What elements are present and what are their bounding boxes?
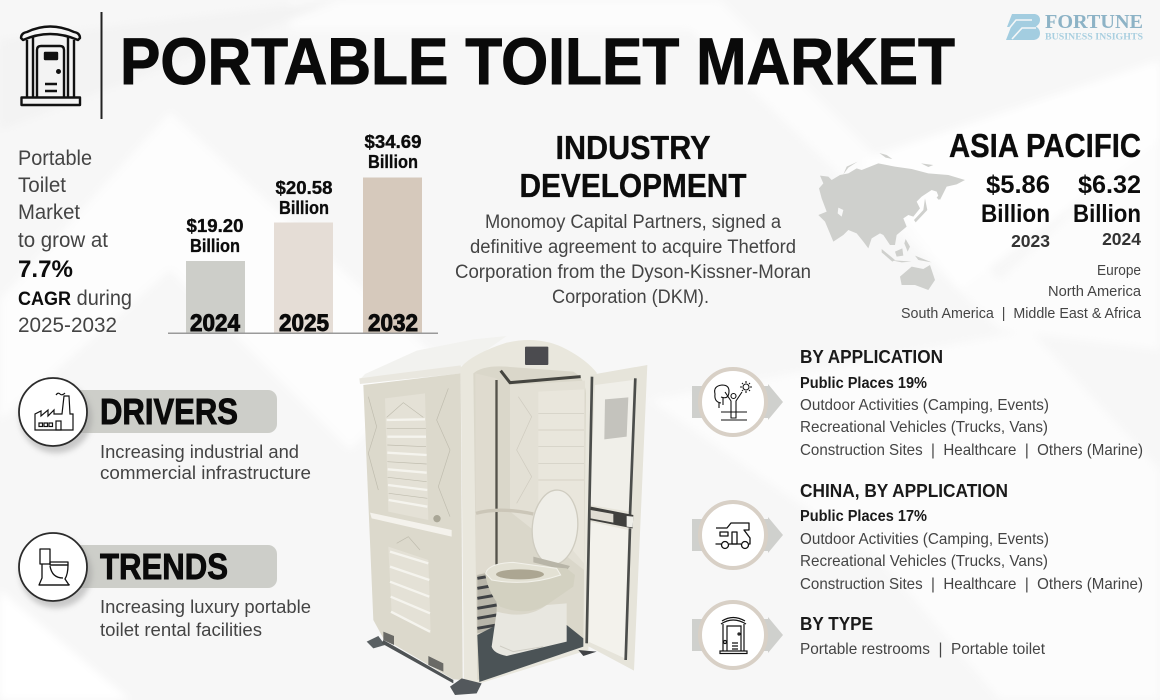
bar chart: 2032	[368, 310, 418, 337]
panel: by application: Recreational Vehicles (Trucks, Vans)	[800, 419, 1048, 436]
panel: China by application: Outdoor Activities (Camping, Events)	[800, 531, 1049, 548]
cabin roof	[360, 336, 507, 379]
front frame	[461, 340, 597, 684]
toilet	[485, 488, 581, 656]
panel: Asia Pacific: North America	[1048, 283, 1142, 300]
left wall	[363, 373, 463, 680]
panel: Asia Pacific: $6.32	[1078, 171, 1141, 199]
panel: by application: Outdoor Activities (Camping, Events)	[800, 397, 1049, 414]
logo: Fortune Business Insights: BUSINESS INSIGHTS	[1045, 32, 1143, 42]
panel: China by application: CHINA, BY APPLICATION	[800, 480, 1008, 501]
panel: Asia Pacific	[901, 127, 1142, 322]
text block: market growth: Toilet	[18, 174, 66, 197]
text block: market growth: 2025-2032	[18, 314, 117, 337]
bar chart: $34.69	[364, 131, 422, 152]
panel: trends	[19, 533, 311, 640]
panel: Asia Pacific: ASIA PACIFIC	[949, 127, 1141, 164]
bar chart: $19.20	[186, 215, 244, 236]
panel: Asia Pacific: $5.86	[986, 171, 1050, 199]
icon: recreational vehicle	[692, 502, 783, 568]
panel: Asia Pacific: Billion	[1073, 200, 1141, 228]
trends heading: TRENDS	[100, 546, 228, 587]
trends label bar	[70, 545, 277, 588]
text block: market growth: to grow at	[18, 229, 108, 252]
panel: Asia Pacific: Billion	[981, 200, 1050, 228]
illustration: portable toilet cabin	[359, 336, 647, 695]
panel: industry development: Corporation (DKM).	[552, 287, 709, 308]
brand plate	[525, 347, 548, 365]
drivers text: Increasing industrial and	[100, 441, 299, 462]
icon: toilet	[19, 533, 87, 601]
panel: Asia Pacific: 2023	[1011, 231, 1050, 251]
floor	[477, 571, 497, 633]
logo: Fortune Business Insights	[1006, 11, 1143, 42]
text block: market growth: 7.7%	[18, 256, 73, 283]
panel: drivers	[19, 378, 311, 483]
panel: by type	[800, 613, 1046, 658]
logo: Fortune Business Insights: FORTUNE	[1045, 11, 1143, 33]
panel: by application: Public Places 19%	[800, 375, 927, 392]
bar chart: 2024	[190, 310, 241, 337]
icon: factory	[19, 378, 87, 446]
icon: portable toilet type	[692, 602, 783, 668]
panel: by type: Portable restrooms | Portable toilet	[800, 641, 1046, 658]
panel: industry development	[455, 129, 811, 308]
bar chart: 2025	[279, 310, 329, 337]
trends text	[100, 596, 311, 640]
panel: China by application: Public Places 17%	[800, 508, 927, 525]
text block: market growth	[18, 147, 132, 337]
panel: industry development: Corporation from the Dyson-Kissner-Moran	[455, 262, 811, 283]
panel: Asia Pacific: South America | Middle East & Africa	[901, 305, 1142, 322]
panel: industry development: DEVELOPMENT	[520, 167, 746, 204]
drivers text: commercial infrastructure	[100, 462, 311, 483]
text block: market growth: Market	[18, 201, 80, 224]
panel: by application: BY APPLICATION	[800, 346, 943, 367]
panel: industry development: INDUSTRY	[556, 129, 710, 166]
door	[586, 365, 647, 671]
drivers heading: DRIVERS	[100, 391, 238, 432]
text block: market growth: CAGR during	[18, 287, 132, 310]
panel: China by application	[800, 480, 1143, 593]
drivers label bar	[70, 390, 277, 433]
bar chart: Billion	[368, 151, 418, 172]
panel: by application	[800, 346, 1143, 459]
bar chart: Billion	[190, 235, 240, 256]
trends text: Increasing luxury portable	[100, 596, 311, 617]
panel: by application: Construction Sites | Healthcare | Others (Marine)	[800, 442, 1143, 459]
text block: market growth: Portable	[18, 147, 92, 170]
title: PORTABLE TOILET MARKET	[120, 24, 955, 98]
bar chart: Billion	[279, 197, 329, 218]
icon: portable toilet header	[21, 26, 80, 105]
bar chart	[168, 131, 438, 337]
panel: by type: BY TYPE	[800, 613, 873, 634]
interior	[473, 366, 586, 680]
panel: Asia Pacific: Europe	[1097, 262, 1141, 279]
panel: China by application: Construction Sites | Healthcare | Others (Marine)	[800, 576, 1143, 593]
base feet	[367, 636, 385, 648]
panel: industry development: definitive agreement to acquire Thetford	[470, 237, 796, 258]
bar chart: $20.58	[276, 177, 332, 198]
panel: industry development: Monomoy Capital Partners, signed a	[485, 212, 781, 233]
map: Asia Pacific	[818, 153, 965, 290]
panel: China by application: Recreational Vehicles (Trucks, Vans)	[800, 553, 1048, 570]
divider	[100, 12, 102, 119]
drivers text	[100, 441, 311, 483]
trends text: toilet rental facilities	[100, 619, 262, 640]
panel: Asia Pacific: 2024	[1102, 229, 1141, 249]
icon: by application	[692, 369, 783, 435]
